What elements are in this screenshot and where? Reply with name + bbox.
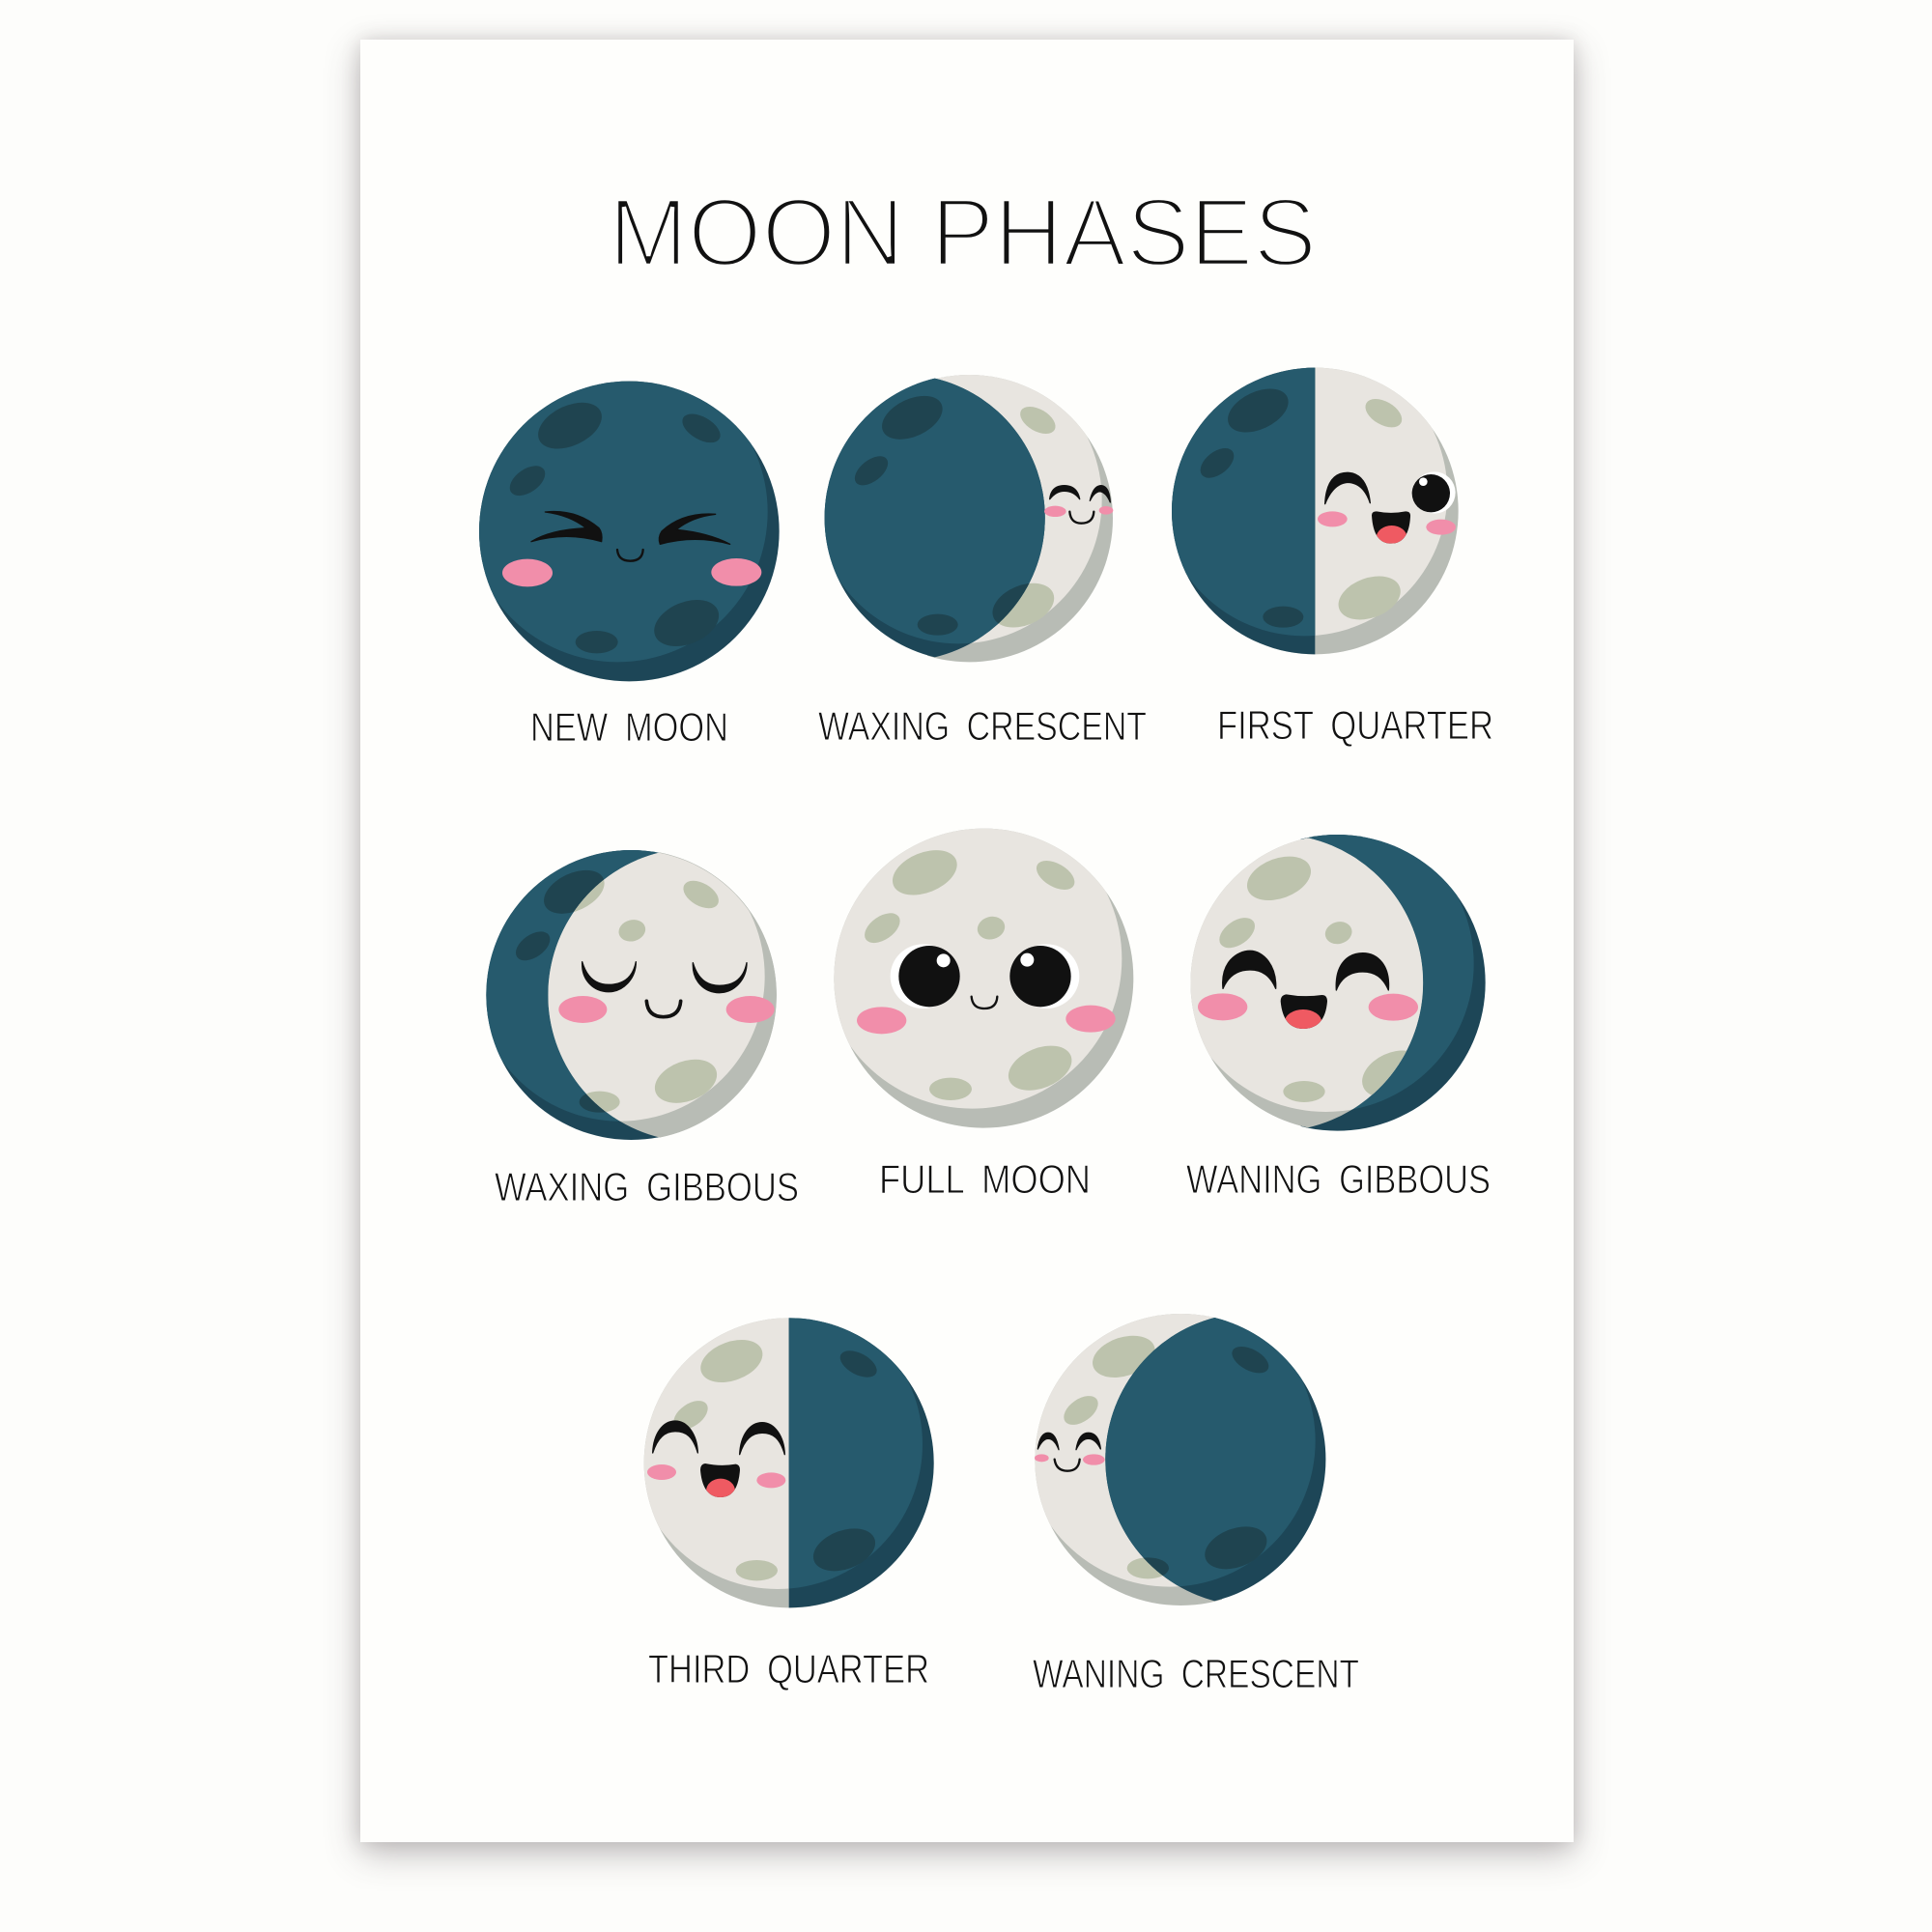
label: waxing gibbous: WAXING GIBBOUS	[495, 1164, 799, 1209]
poster content	[479, 200, 1492, 1690]
face: smiling	[1035, 1433, 1105, 1471]
panel: first quarter	[1161, 350, 1493, 748]
face: squinting	[502, 512, 761, 586]
label: waning gibbous: WANING GIBBOUS	[1186, 1156, 1491, 1202]
moon body	[468, 362, 780, 681]
dark lens	[1105, 1318, 1325, 1602]
panel: waxing gibbous	[486, 850, 797, 1201]
panel: waxing crescent	[814, 356, 1147, 749]
moon body	[822, 810, 1133, 1128]
label: waxing crescent: WAXING CRESCENT	[818, 703, 1147, 749]
panel: waning gibbous	[1186, 835, 1489, 1193]
lit half	[633, 1299, 934, 1607]
moon illustration: third quarter	[633, 1299, 934, 1607]
poster card	[360, 40, 1574, 1842]
craters	[504, 393, 725, 655]
lit half	[1161, 350, 1459, 654]
panel: full moon	[834, 829, 1134, 1193]
moon illustration: waxing crescent	[825, 375, 1113, 663]
panel: waning crescent	[1024, 1295, 1359, 1696]
moon illustration: waxing gibbous	[475, 832, 777, 1141]
moon illustration: first quarter	[1161, 350, 1459, 654]
title: MOON PHASES	[609, 179, 1317, 287]
label: first quarter: FIRST QUARTER	[1217, 702, 1493, 748]
face: laughing	[1198, 951, 1418, 1036]
face: smiling	[1044, 486, 1113, 524]
panel: third quarter	[633, 1299, 934, 1691]
dark half	[788, 1318, 934, 1607]
moon illustration: waning crescent	[1035, 1314, 1325, 1605]
face: laughing	[647, 1421, 785, 1503]
face: sleeping	[558, 962, 775, 1023]
panel: new moon	[479, 381, 780, 741]
lit moon	[927, 375, 1113, 663]
moon illustration: waning gibbous	[1178, 815, 1486, 1131]
lit lens	[548, 852, 777, 1138]
face: big eyes	[857, 944, 1116, 1034]
label: waning crescent: WANING CRESCENT	[1033, 1651, 1359, 1696]
lit lens	[1190, 838, 1424, 1128]
moon illustration: full moon	[822, 810, 1133, 1128]
dark lens	[825, 379, 1045, 657]
dark crescent	[1300, 835, 1486, 1131]
moon illustration: new moon	[468, 362, 780, 681]
dark half	[1172, 367, 1316, 655]
label: new moon: NEW MOON	[530, 704, 728, 750]
craters	[860, 841, 1079, 1100]
dark crescent	[486, 850, 659, 1140]
face: winking	[1318, 471, 1456, 550]
label: full moon: FULL MOON	[879, 1156, 1091, 1202]
label: third quarter: THIRD QUARTER	[648, 1646, 929, 1691]
lit moon	[1035, 1314, 1222, 1605]
